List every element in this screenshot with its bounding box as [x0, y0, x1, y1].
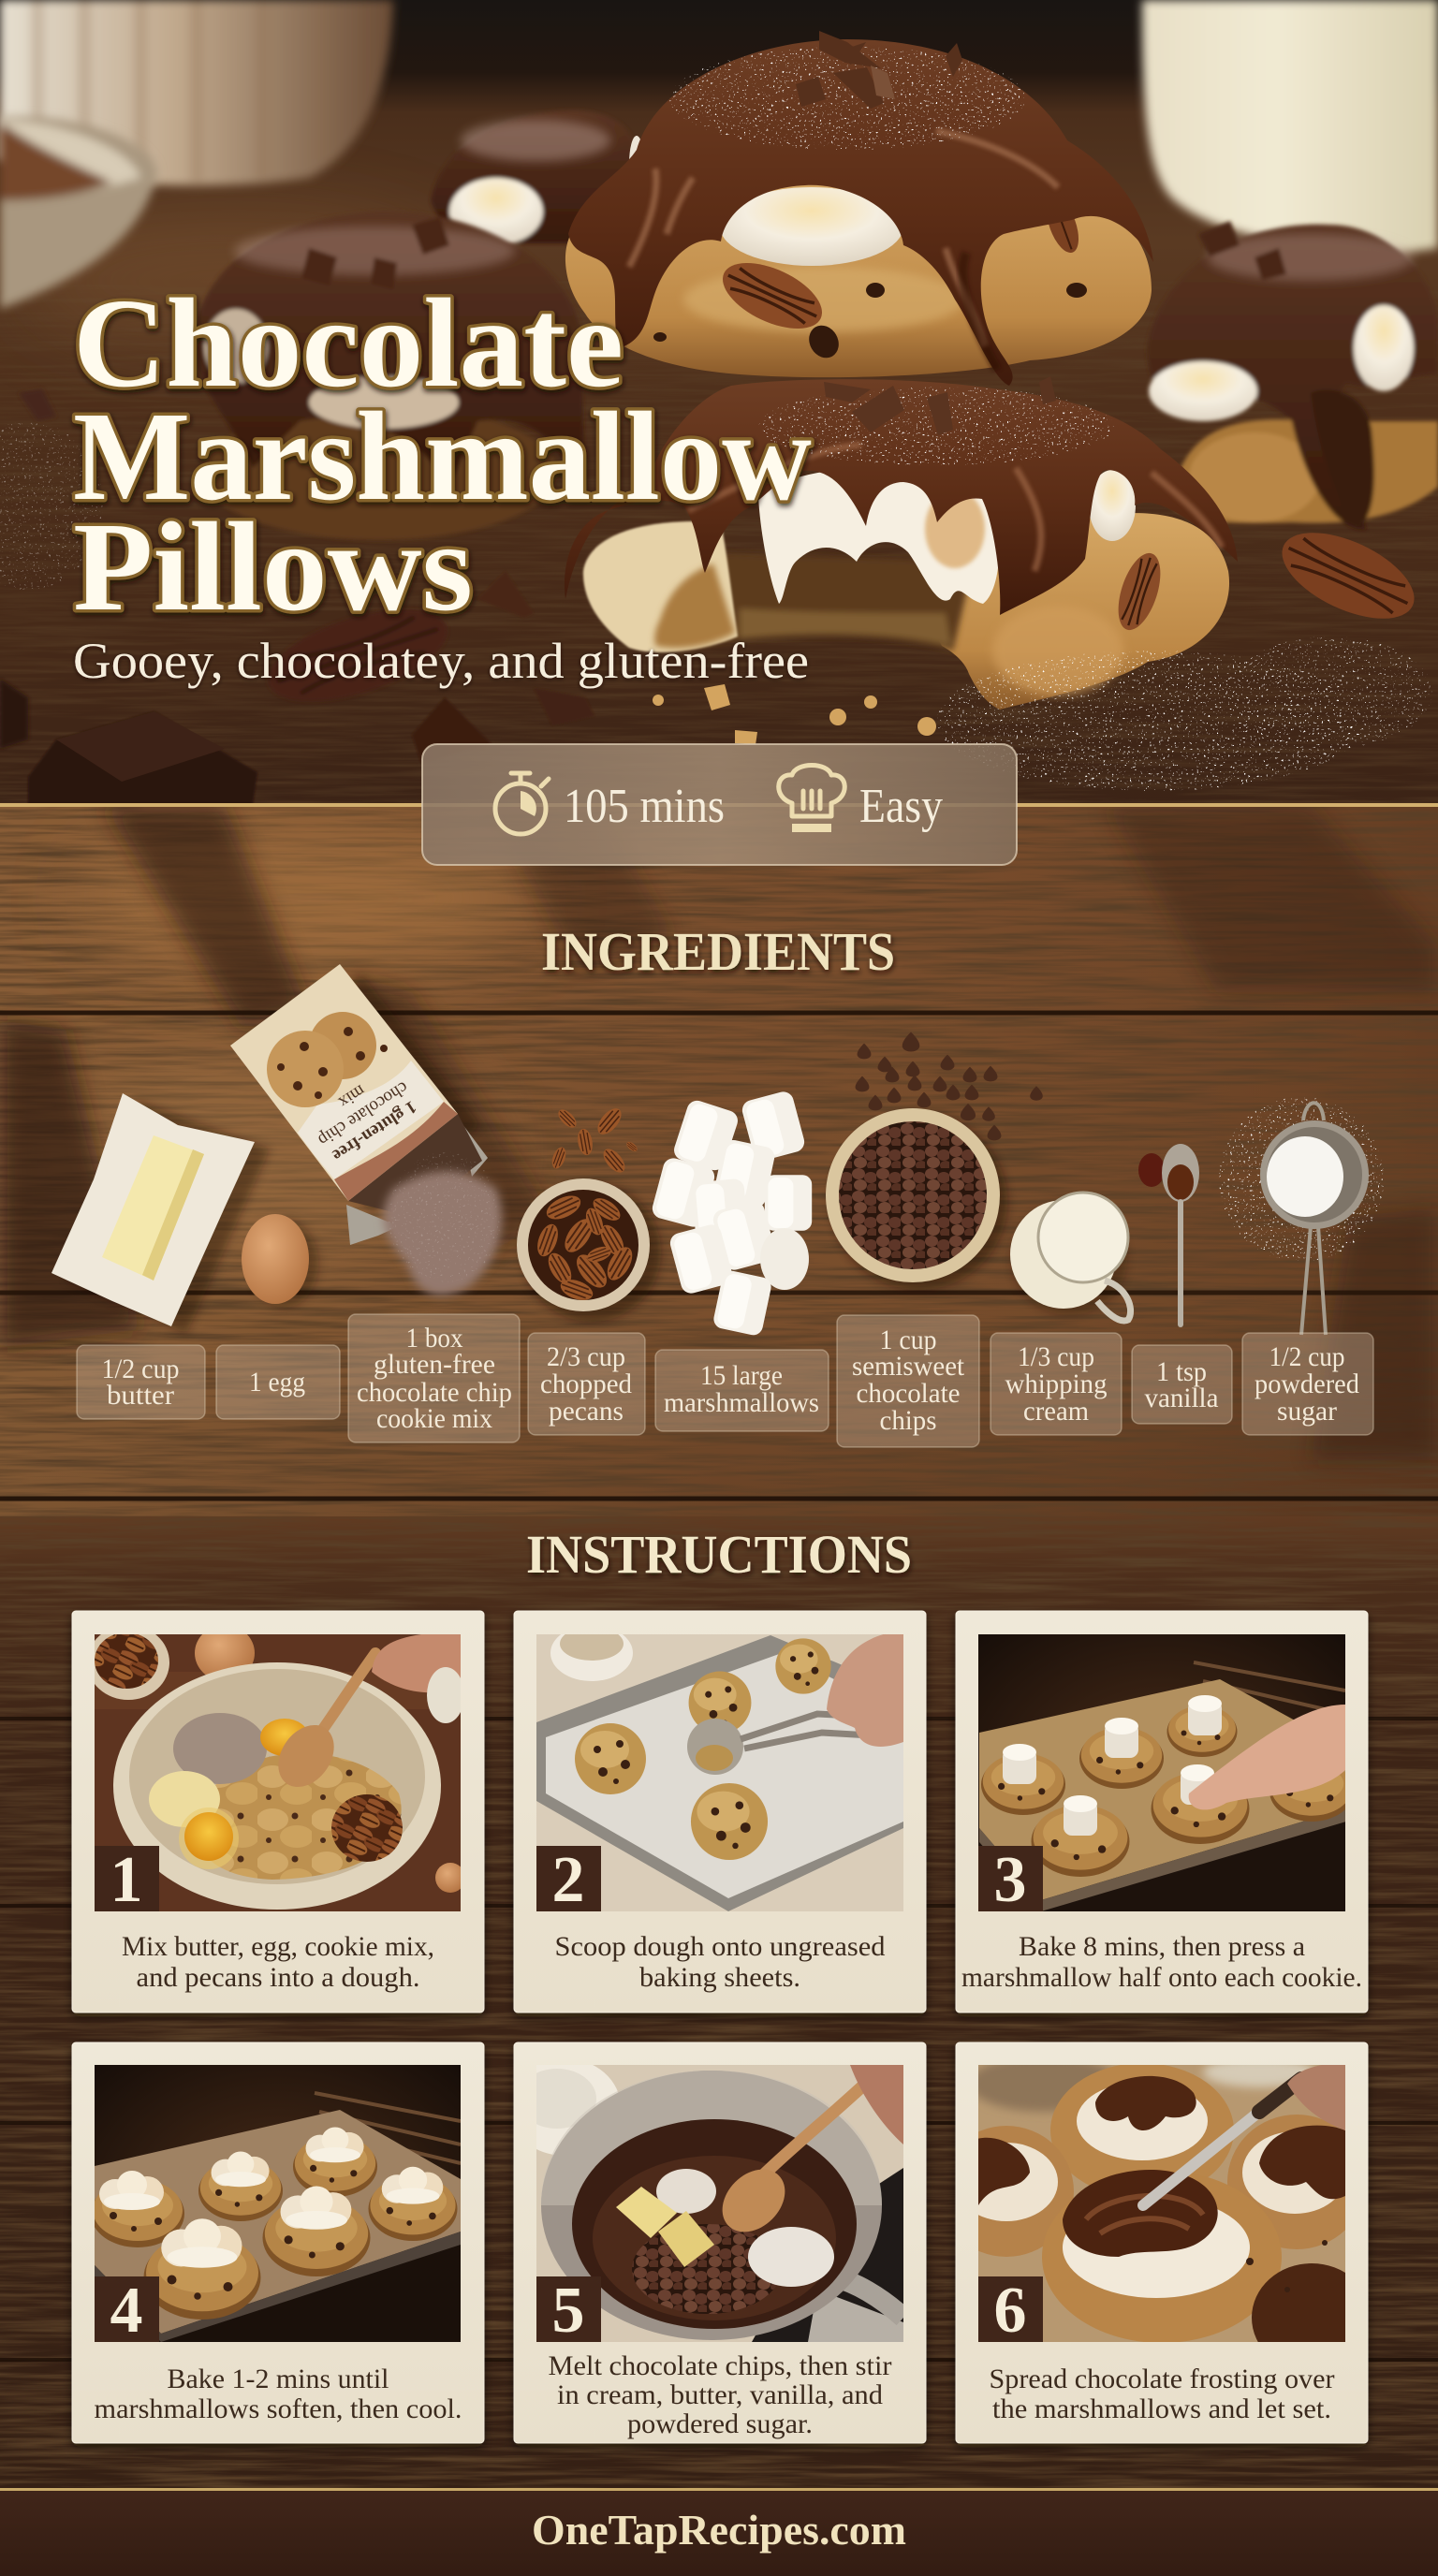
butter in wrapper	[51, 1093, 270, 1334]
page background: rustic wood	[0, 805, 1438, 2490]
hero gold divider	[0, 803, 1438, 807]
step number 6	[978, 2275, 1043, 2347]
step number 2: 2	[552, 1844, 584, 1916]
step 1 text: and pecans into a dough.	[137, 1962, 419, 1993]
step 5 text: powdered sugar.	[627, 2408, 813, 2439]
label: powdered sugar: 1/2 cup	[1269, 1341, 1344, 1372]
step card 3	[956, 1611, 1368, 2012]
step number 1: 1	[110, 1844, 142, 1916]
label: cookie mix: 1 box	[406, 1323, 462, 1354]
marshmallows	[720, 187, 903, 266]
chocolate chunks and crumbs	[0, 388, 936, 805]
pecan on cookie	[713, 250, 831, 342]
egg	[242, 1214, 318, 1308]
title: Chocolate	[73, 273, 624, 414]
marshmallows	[650, 1090, 812, 1337]
step card 4	[72, 2042, 484, 2443]
step number 1	[95, 1844, 159, 1916]
label: vanilla: vanilla	[1144, 1383, 1219, 1413]
label: butter: butter	[107, 1380, 174, 1411]
label: cookie mix: gluten-free	[374, 1349, 495, 1380]
heading: ingredients: INGREDIENTS	[541, 921, 895, 982]
step 5 photo: melting chocolate	[536, 2065, 903, 2342]
label: cookie mix	[348, 1314, 520, 1442]
heading: instructions: INSTRUCTIONS	[526, 1524, 912, 1585]
whipping cream jug	[1010, 1193, 1131, 1321]
step 1 text: Mix butter, egg, cookie mix,	[122, 1931, 434, 1962]
cookie mix box: chocolate chip	[315, 1077, 412, 1149]
label: whipping cream: 1/3 cup	[1018, 1341, 1094, 1372]
bottom cookie frosting	[565, 379, 1238, 615]
step 4 photo: softened marshmallows	[95, 2065, 461, 2342]
step 5 text: in cream, butter, vanilla, and	[557, 2379, 883, 2410]
step 2 photo: scooping dough	[536, 1634, 903, 1911]
time and difficulty badge	[422, 744, 1017, 865]
difficulty: Easy	[859, 780, 943, 833]
powdered sugar scatter	[0, 421, 1432, 791]
cookie mix powder	[383, 1151, 502, 1295]
label: vanilla	[1132, 1345, 1232, 1424]
loose chocolate chips	[856, 1032, 1043, 1140]
step 2 text: Scoop dough onto ungreased	[554, 1931, 886, 1962]
label: cookie mix: chocolate chip	[357, 1377, 512, 1408]
step number 4: 4	[110, 2275, 142, 2347]
cookie mix box: 1 gluten-free	[329, 1096, 419, 1165]
step 6 photo: frosting cookies	[978, 2065, 1345, 2342]
label: chocolate chips: chocolate	[856, 1378, 961, 1409]
step card 1	[72, 1611, 484, 2012]
step 3 photo: pressing marshmallows	[978, 1634, 1345, 1911]
label: pecans	[528, 1333, 645, 1435]
pecan bowl	[517, 1178, 661, 1322]
title: Pillows	[73, 497, 473, 637]
label: egg	[216, 1345, 340, 1419]
step number 3: 3	[994, 1844, 1026, 1916]
step 5 text: Melt chocolate chips, then stir	[549, 2350, 892, 2381]
back cookie	[431, 110, 637, 245]
label: marshmallows	[655, 1350, 829, 1431]
chocolate chip bowl	[826, 1108, 1007, 1290]
step number 2	[536, 1844, 601, 1916]
step card 2	[514, 1611, 926, 2012]
step card 5	[508, 2042, 926, 2443]
label: butter	[77, 1345, 205, 1419]
step 3 text: marshmallow half onto each cookie.	[961, 1962, 1362, 1993]
main top cookie	[565, 31, 1153, 386]
label: powdered sugar: powdered	[1255, 1368, 1359, 1399]
subtitle: Gooey, chocolatey, and gluten-free	[73, 633, 809, 689]
small cocoa bowl	[0, 116, 157, 309]
cookie mix box	[230, 964, 488, 1245]
right cookie	[1147, 221, 1438, 529]
label: pecans: 2/3 cup	[547, 1341, 625, 1372]
label: marshmallows: 15 large	[700, 1360, 783, 1391]
bitten dough	[583, 521, 738, 652]
scattered pecan pieces	[550, 1105, 638, 1177]
vanilla spoon	[1138, 1144, 1199, 1325]
step 3 text: Bake 8 mins, then press a	[1019, 1931, 1305, 1962]
step 4 text	[94, 2364, 462, 2424]
label: vanilla: 1 tsp	[1156, 1356, 1207, 1387]
ingredient labels	[77, 1314, 1373, 1447]
label: whipping cream	[990, 1333, 1122, 1435]
step number 6: 6	[994, 2275, 1026, 2347]
title	[73, 273, 812, 637]
label: whipping cream: whipping	[1005, 1368, 1107, 1399]
step 3 text	[961, 1931, 1362, 1993]
step 6 text: Spread chocolate frosting over	[989, 2364, 1335, 2394]
label: chocolate chips: chips	[880, 1405, 936, 1436]
label: chocolate chips: semisweet	[852, 1351, 965, 1382]
step number 4	[95, 2275, 159, 2347]
loose pecans	[257, 515, 1427, 720]
milk glass	[1142, 0, 1438, 253]
title: Marshmallow	[73, 387, 812, 527]
icon: chef hat	[779, 766, 844, 832]
duration: 105 mins	[564, 780, 725, 833]
step card 6	[939, 2042, 1372, 2443]
icon: stopwatch	[495, 773, 549, 834]
step 6 text	[989, 2364, 1335, 2424]
step number 5: 5	[552, 2275, 584, 2347]
footer band	[0, 2488, 1438, 2576]
chocolate frosting with drips	[568, 39, 1153, 386]
label: pecans: pecans	[549, 1396, 624, 1427]
ingredient illustrations	[51, 964, 1384, 1337]
step number 5	[536, 2275, 601, 2347]
hero photo: chocolate marshmallow cookies	[0, 0, 1438, 805]
melted marshmallow	[758, 468, 999, 604]
label: powdered sugar	[1242, 1333, 1373, 1435]
label: cookie mix: cookie mix	[376, 1403, 492, 1434]
label: egg: 1 egg	[249, 1367, 305, 1398]
bottom bitten cookie	[565, 376, 1238, 710]
step 1 text	[122, 1931, 434, 1993]
step 4 text: marshmallows soften, then cool.	[94, 2393, 462, 2424]
label: whipping cream: cream	[1023, 1396, 1089, 1427]
powdered sugar sieve	[1219, 1097, 1384, 1335]
background bowl	[0, 0, 393, 185]
step 4 text: Bake 1-2 mins until	[167, 2364, 389, 2394]
right half of cookie	[917, 513, 1229, 710]
step 2 text	[554, 1931, 886, 1993]
cookie mix box: mix	[334, 1080, 369, 1112]
step 5 text	[549, 2350, 892, 2439]
label: chocolate chips: 1 cup	[880, 1325, 936, 1355]
footer website: OneTapRecipes.com	[532, 2506, 906, 2554]
label: marshmallows: marshmallows	[664, 1387, 819, 1418]
step number 3	[978, 1844, 1043, 1916]
crumb interior	[674, 552, 974, 651]
left cookie	[193, 212, 585, 540]
label: pecans: chopped	[540, 1368, 632, 1399]
label: chocolate chips	[837, 1315, 979, 1447]
step 1 photo: mixing dough	[95, 1634, 461, 1911]
step 2 text: baking sheets.	[639, 1962, 800, 1993]
label: powdered sugar: sugar	[1277, 1396, 1337, 1427]
label: butter: 1/2 cup	[101, 1354, 180, 1384]
step 6 text: the marshmallows and let set.	[992, 2393, 1331, 2424]
